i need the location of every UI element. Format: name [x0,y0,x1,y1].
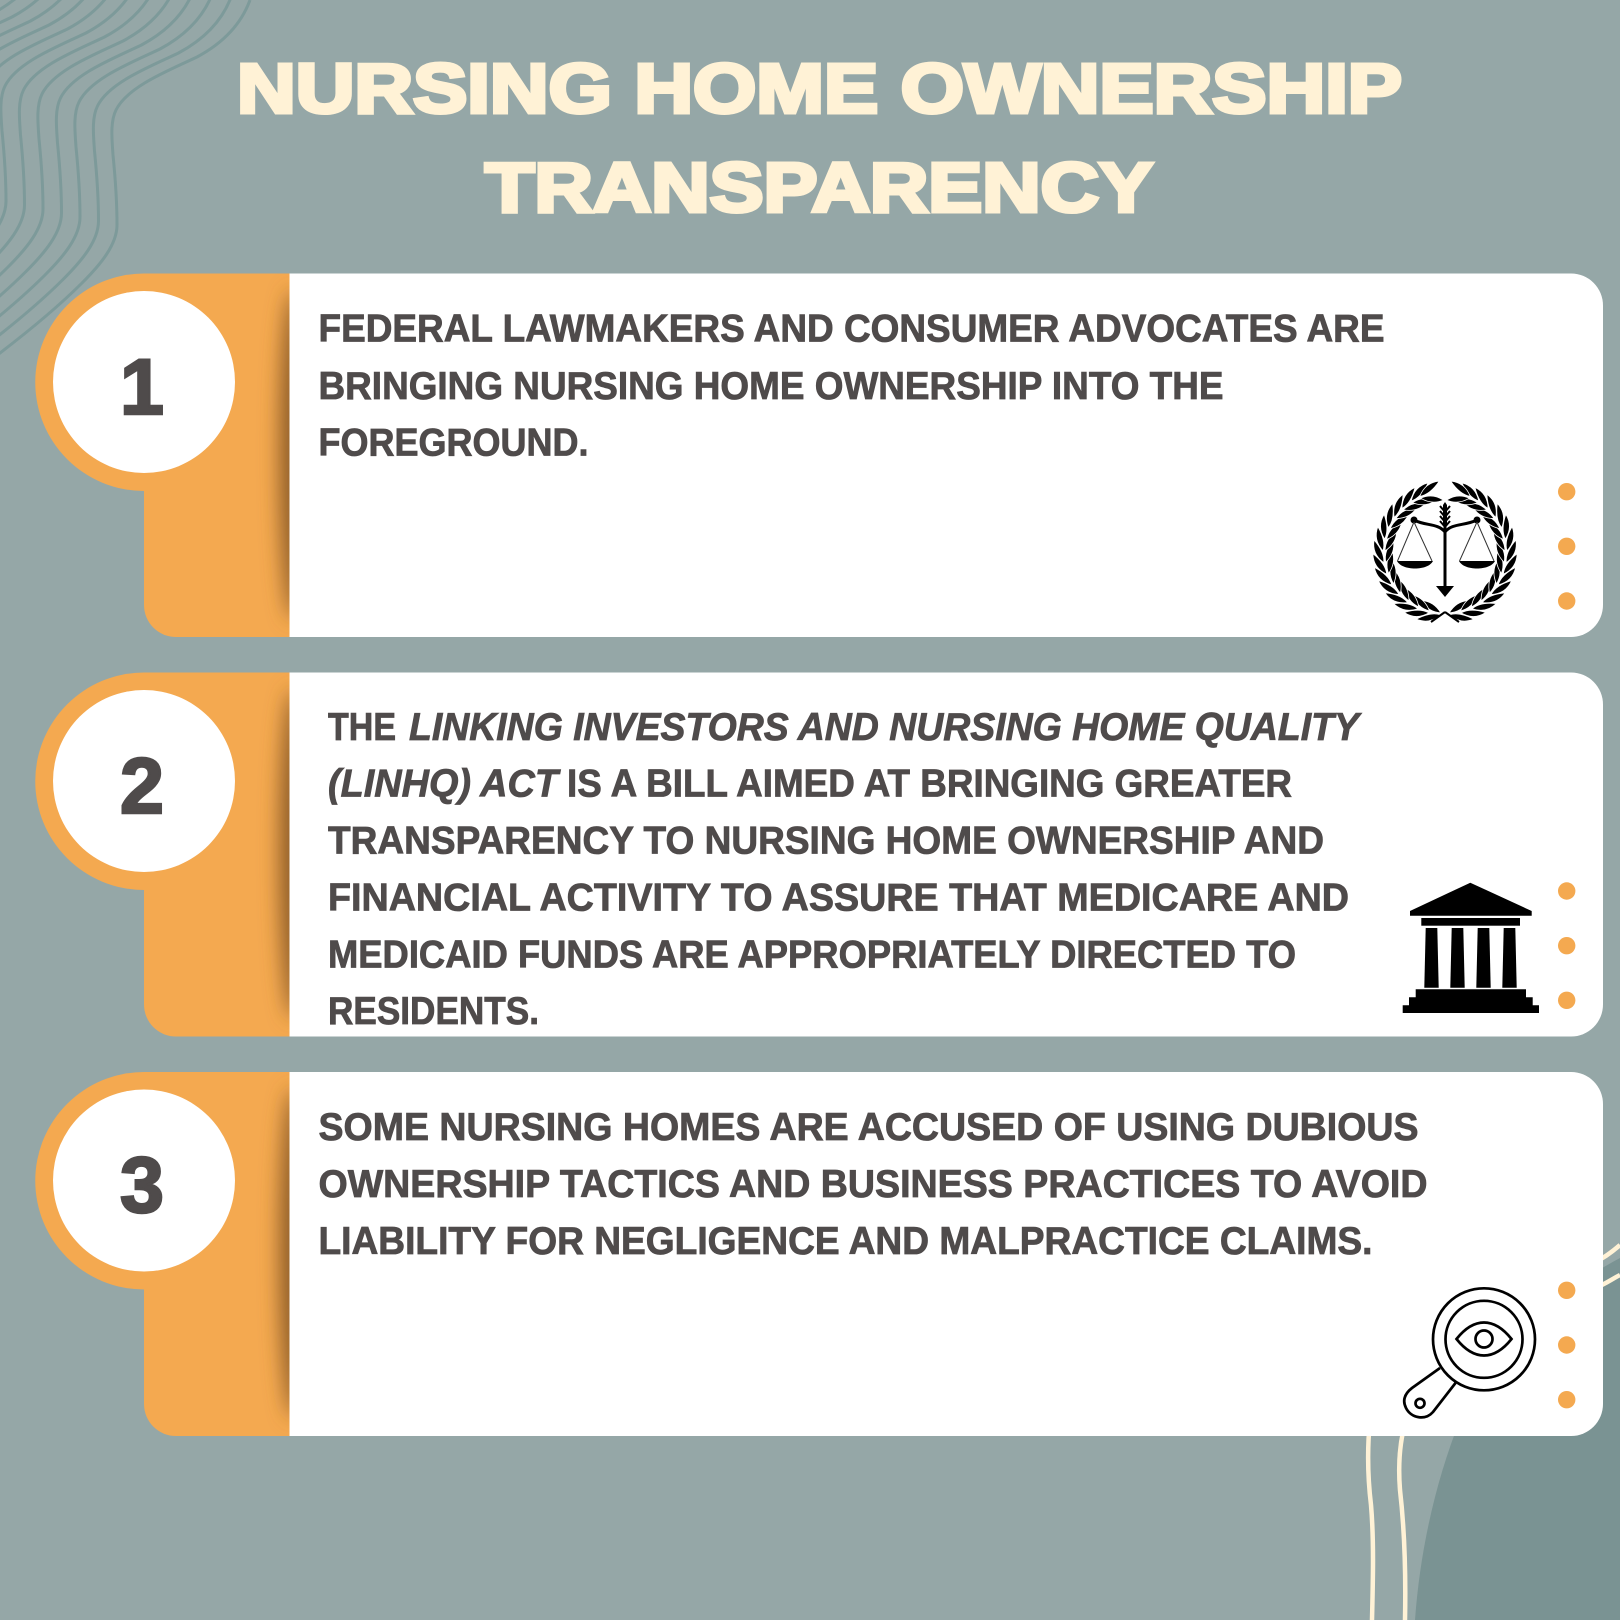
step 2 text: (LINHQ) ACT [328,763,561,806]
step 2 text: FINANCIAL ACTIVITY TO ASSURE THAT MEDICARE AND [328,877,1349,920]
dark teal corner shape bottom right [1415,1258,1620,1620]
step 1 text [318,308,1384,464]
orange tab with number badge [35,274,308,637]
orange tab with number badge: 3 [120,1140,164,1229]
wavy line decoration top left [0,0,250,395]
icon: laurel wreath with scales of justice [1372,480,1518,622]
white text card [290,672,1603,1036]
panel: step 2 [35,672,1603,1036]
step 3 text: LIABILITY FOR NEGLIGENCE AND MALPRACTICE CLAIMS. [318,1220,1372,1263]
step 2 text: LINKING INVESTORS AND NURSING HOME QUALITY [409,706,1362,749]
step 2 text: RESIDENTS. [328,990,539,1033]
decorative dots [1558,882,1575,1009]
decorative dots [1558,1282,1575,1408]
white text card [290,1072,1603,1436]
panel: step 3 [35,1072,1603,1436]
orange tab with number badge: 1 [120,342,164,431]
title: TRANSPARENCY [485,148,1153,226]
icon: classical bank building [1403,883,1539,1013]
icon: magnifying glass with eye [1404,1288,1535,1417]
step 1 text: FEDERAL LAWMAKERS AND CONSUMER ADVOCATES ARE [318,308,1384,350]
step 3 text: OWNERSHIP TACTICS AND BUSINESS PRACTICES TO AVOID [318,1163,1428,1206]
step 2 text: TRANSPARENCY TO NURSING HOME OWNERSHIP AND [328,820,1324,863]
step 1 text: FOREGROUND. [318,422,588,464]
orange tab with number badge [35,1072,308,1436]
cream curved lines bottom right [1368,1245,1620,1620]
step 3 text [318,1106,1428,1263]
step 2 text: MEDICAID FUNDS ARE APPROPRIATELY DIRECTED TO [328,934,1296,977]
step 2 text: THE [328,706,396,749]
title [237,50,1402,226]
white text card [290,274,1603,637]
title: NURSING HOME OWNERSHIP [237,50,1402,128]
panel: step 1 [35,274,1603,637]
decorative dots [1558,483,1575,610]
step 2 text [328,706,1362,1033]
step 3 text: SOME NURSING HOMES ARE ACCUSED OF USING DUBIOUS [318,1106,1418,1149]
step 1 text: BRINGING NURSING HOME OWNERSHIP INTO THE [318,365,1224,408]
orange tab with number badge [35,672,308,1036]
orange tab with number badge: 2 [120,741,164,830]
step 2 text: IS A BILL AIMED AT BRINGING GREATER [567,763,1292,806]
